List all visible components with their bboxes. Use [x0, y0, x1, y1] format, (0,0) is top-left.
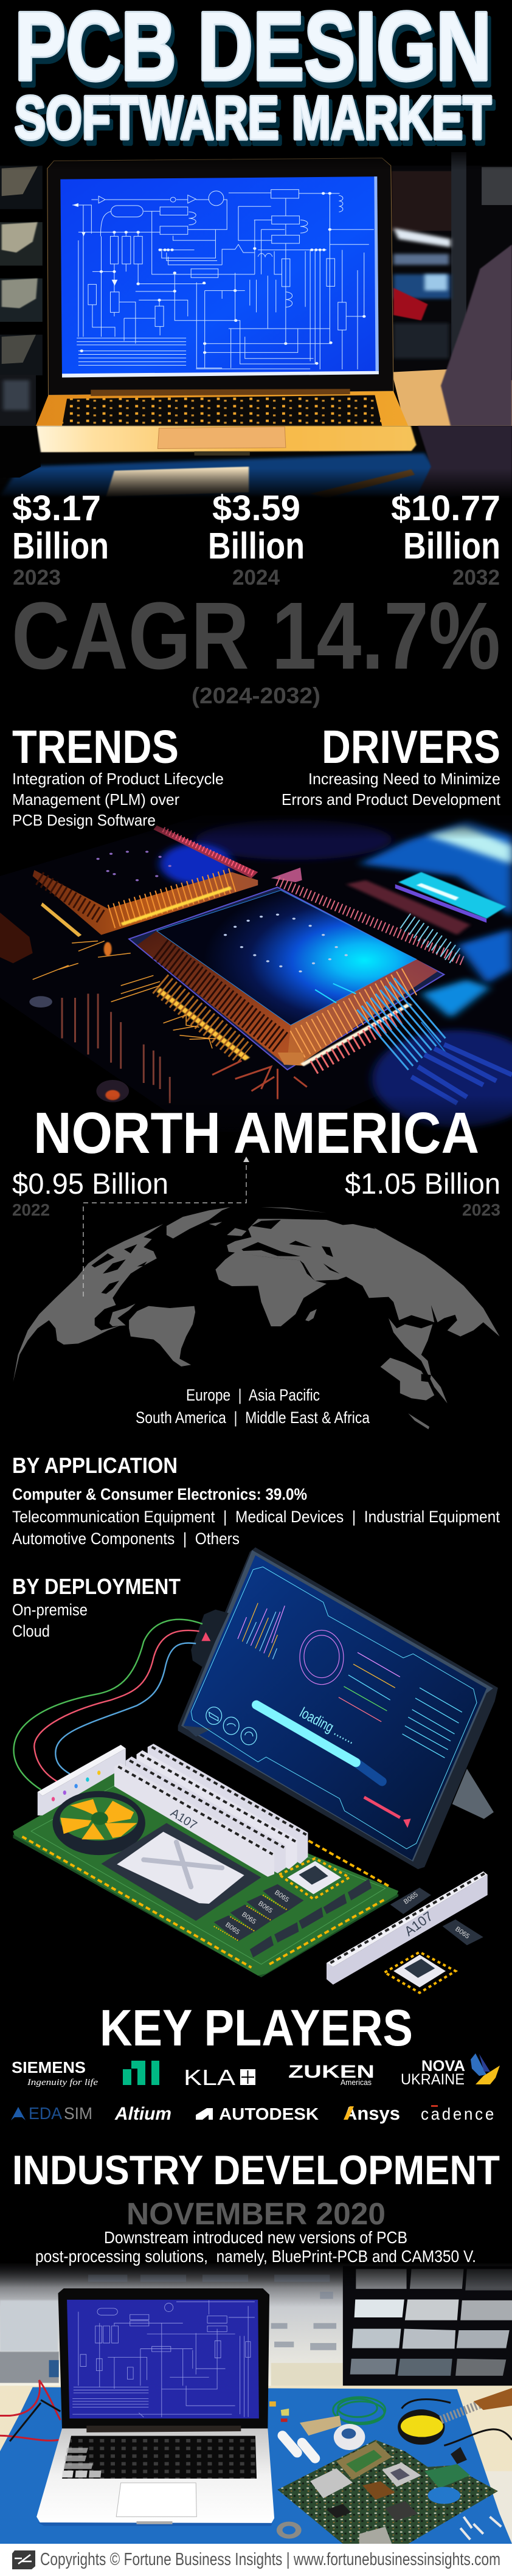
icon circles [206, 1707, 257, 1745]
title [15, 0, 494, 157]
red and black test leads [0, 2380, 60, 2440]
logo: Nova Ukraine: UKRAINE [401, 2071, 465, 2088]
by deployment: BY DEPLOYMENT [12, 1574, 181, 1599]
board labels [168, 1806, 471, 1940]
globe map [13, 1207, 500, 1429]
by application: Automotive Components | Others [12, 1530, 240, 1548]
chip surface dots [224, 914, 348, 972]
New Zealand [408, 1413, 429, 1429]
value: 2023: 2023 [462, 1200, 500, 1219]
trends [12, 721, 224, 829]
Eurasia [227, 1219, 500, 1337]
illustration: tablet [178, 1547, 498, 1869]
value: 2022: $0.95 Billion [12, 1168, 168, 1200]
logo: Zuken: ZUKEN [288, 2062, 375, 2082]
stat: 2023: 2023 [13, 566, 61, 590]
faint schematic [72, 2300, 255, 2417]
Australia [381, 1358, 434, 1401]
value: 2023 [345, 1168, 500, 1219]
Africa [215, 1252, 327, 1326]
fade below chips [0, 1095, 512, 1156]
motherboard [277, 2440, 498, 2544]
laptop screen [67, 2300, 259, 2418]
by deployment: Cloud [12, 1622, 50, 1640]
stat: 2024: 2024 [232, 566, 280, 590]
fade to black under laptop [0, 468, 512, 499]
board labels: A107 [401, 1909, 436, 1939]
touchpad [157, 426, 286, 448]
fade above workbench [0, 2260, 512, 2288]
desk [0, 2386, 512, 2544]
title shadow [18, 0, 494, 157]
upper-left chip [33, 826, 258, 937]
tablet shell [178, 1547, 498, 1869]
small chip [279, 1858, 350, 1899]
date: NOVEMBER 2020 [126, 2196, 386, 2231]
photo: electronics workbench [0, 2263, 512, 2544]
logo: KLA: KLA [184, 2065, 235, 2090]
main chip body [129, 887, 444, 1070]
board labels: B065 [257, 1900, 274, 1915]
ring gauge [300, 1630, 344, 1685]
other regions: South America | Middle East & Africa [136, 1408, 370, 1427]
development text [35, 2228, 476, 2266]
Southeast Asia [389, 1318, 448, 1404]
trends: Integration of Product Lifecycle [12, 770, 224, 788]
batteries [283, 2435, 315, 2459]
by application [12, 1453, 500, 1548]
solder spool [334, 2424, 365, 2450]
logo: Altium: Altium [114, 2104, 171, 2124]
trends: PCB Design Software [12, 811, 156, 829]
progress bar [356, 1763, 382, 1781]
illustration: circuit board [13, 1744, 488, 1993]
stat: 2024 [208, 489, 305, 590]
logo: Siemens: SIEMENS [12, 2058, 86, 2076]
schematic [72, 190, 374, 369]
North America holes [91, 1244, 147, 1294]
wire coil [333, 2397, 386, 2424]
logo: Autodesk: AUTODESK [219, 2104, 319, 2123]
loose chips [385, 1888, 483, 1993]
board labels: A107 [168, 1806, 199, 1833]
workbench items [0, 2380, 512, 2544]
laptop deck top [36, 391, 408, 426]
Greenland [167, 1207, 230, 1239]
bearing ring [277, 2522, 302, 2539]
screen frame [191, 1567, 477, 1849]
board labels: B065 [273, 1889, 290, 1904]
upper-right cyan chip [271, 820, 512, 1018]
board labels: B065 [403, 1891, 420, 1906]
logo: Nova Ukraine [401, 2053, 500, 2088]
value: 2022: 2022 [12, 1200, 50, 1219]
Madagascar [305, 1309, 317, 1321]
logo: NI [123, 2061, 159, 2085]
left parts bins [0, 165, 43, 426]
stat: 2023: $3.17 [12, 489, 101, 528]
laptop base and desk, fading to black [0, 426, 512, 500]
cables [14, 1620, 202, 1789]
glow lines and pins [0, 913, 512, 1103]
row of black chips [250, 1879, 372, 1957]
photo: laptop showing circuit schematic [0, 152, 512, 426]
dark board [0, 815, 512, 1132]
logo: Nova Ukraine: NOVA [421, 2058, 465, 2075]
loading label: loading ....... [297, 1704, 358, 1747]
laptop lid [47, 158, 393, 395]
stat: 2024: Billion [208, 525, 305, 566]
stat: 2024: $3.59 [212, 489, 300, 528]
fade above laptop [0, 146, 512, 170]
North America [13, 1224, 164, 1382]
fan [52, 1791, 145, 1855]
stat: 2023: Billion [12, 525, 109, 566]
footer logo [12, 2550, 35, 2569]
stand [452, 1769, 494, 1819]
connector [191, 1610, 229, 1668]
development text: Downstream introduced new versions of PCB [104, 2228, 407, 2247]
board labels: B065 [240, 1911, 257, 1926]
stat: 2023 [12, 489, 109, 590]
loose pins [460, 2517, 501, 2539]
blue mat [0, 2387, 512, 2544]
footer [0, 2544, 512, 2576]
by deployment: On-premise [12, 1601, 88, 1619]
logo: Zuken: Americas [341, 2078, 372, 2087]
value: 2022 [12, 1168, 168, 1219]
fade above chips [0, 809, 512, 840]
logo: Ansys: Ansys [344, 2103, 400, 2124]
logo: EDASIM: SIM [64, 2104, 92, 2123]
solder stand [398, 2409, 445, 2445]
green board [13, 1773, 398, 1976]
CAGR: (2024-2032) [192, 683, 320, 708]
logo: KLA [184, 2065, 255, 2090]
parts drawers [343, 2266, 512, 2386]
stat: 2032 [391, 489, 500, 590]
logo: Cadence: cadence [421, 2104, 496, 2123]
board labels: B065 [454, 1926, 471, 1940]
Eurasia holes [241, 1217, 444, 1279]
islands [227, 1228, 246, 1236]
tablet screen [184, 1555, 486, 1861]
blurred background right [392, 152, 512, 426]
board labels: B065 [224, 1921, 241, 1936]
keyboard [62, 2436, 257, 2479]
logo: Siemens: Ingenuity for life [27, 2078, 98, 2087]
loose memory slot [327, 1871, 488, 1985]
photo: glowing chips [0, 815, 512, 1132]
drivers: Errors and Product Development [282, 790, 501, 809]
wall prints [88, 2275, 336, 2350]
heading: key players: KEY PLAYERS [100, 1999, 413, 2056]
logo: Zuken [288, 2062, 375, 2087]
laptop front [36, 426, 417, 452]
by deployment [12, 1574, 181, 1640]
South America [129, 1306, 195, 1366]
logo: EDASIM: EDA [29, 2104, 62, 2123]
schematic junction dots [72, 192, 365, 365]
dashed arrow from map to heading [83, 1157, 249, 1297]
by application: Computer & Consumer Electronics: 39.0% [12, 1485, 307, 1503]
value: 2023: $1.05 Billion [345, 1168, 500, 1200]
logo: EDASIM [11, 2104, 92, 2123]
CPU [101, 1823, 261, 1921]
resistors [300, 2415, 341, 2435]
touchpad [116, 2483, 196, 2517]
laptop deck [36, 2429, 274, 2524]
stat: 2032: $10.77 [391, 489, 500, 528]
trends: TRENDS [12, 721, 179, 773]
alert bar [364, 1797, 400, 1817]
other regions: Europe | Asia Pacific [186, 1386, 320, 1404]
laptop lid [58, 2288, 269, 2429]
stat: 2032: 2032 [452, 566, 500, 590]
LED panel [38, 1745, 126, 1815]
by application: BY APPLICATION [12, 1453, 178, 1478]
Central America [109, 1304, 136, 1326]
trends: Management (PLM) over [12, 790, 179, 809]
drivers [282, 721, 501, 809]
wall [0, 2263, 512, 2389]
other regions [136, 1386, 370, 1427]
screen lines [339, 1652, 462, 1758]
keyboard [62, 395, 382, 426]
memory slots [114, 1744, 308, 1877]
desk paper [106, 467, 249, 496]
title text [15, 0, 491, 152]
B065 chips [214, 1884, 303, 1941]
logo: Siemens [12, 2058, 98, 2087]
bar lines [238, 1603, 285, 1659]
drivers: Increasing Need to Minimize [308, 770, 500, 788]
gold edge contacts [22, 1837, 390, 1968]
laptop screen [60, 176, 379, 377]
